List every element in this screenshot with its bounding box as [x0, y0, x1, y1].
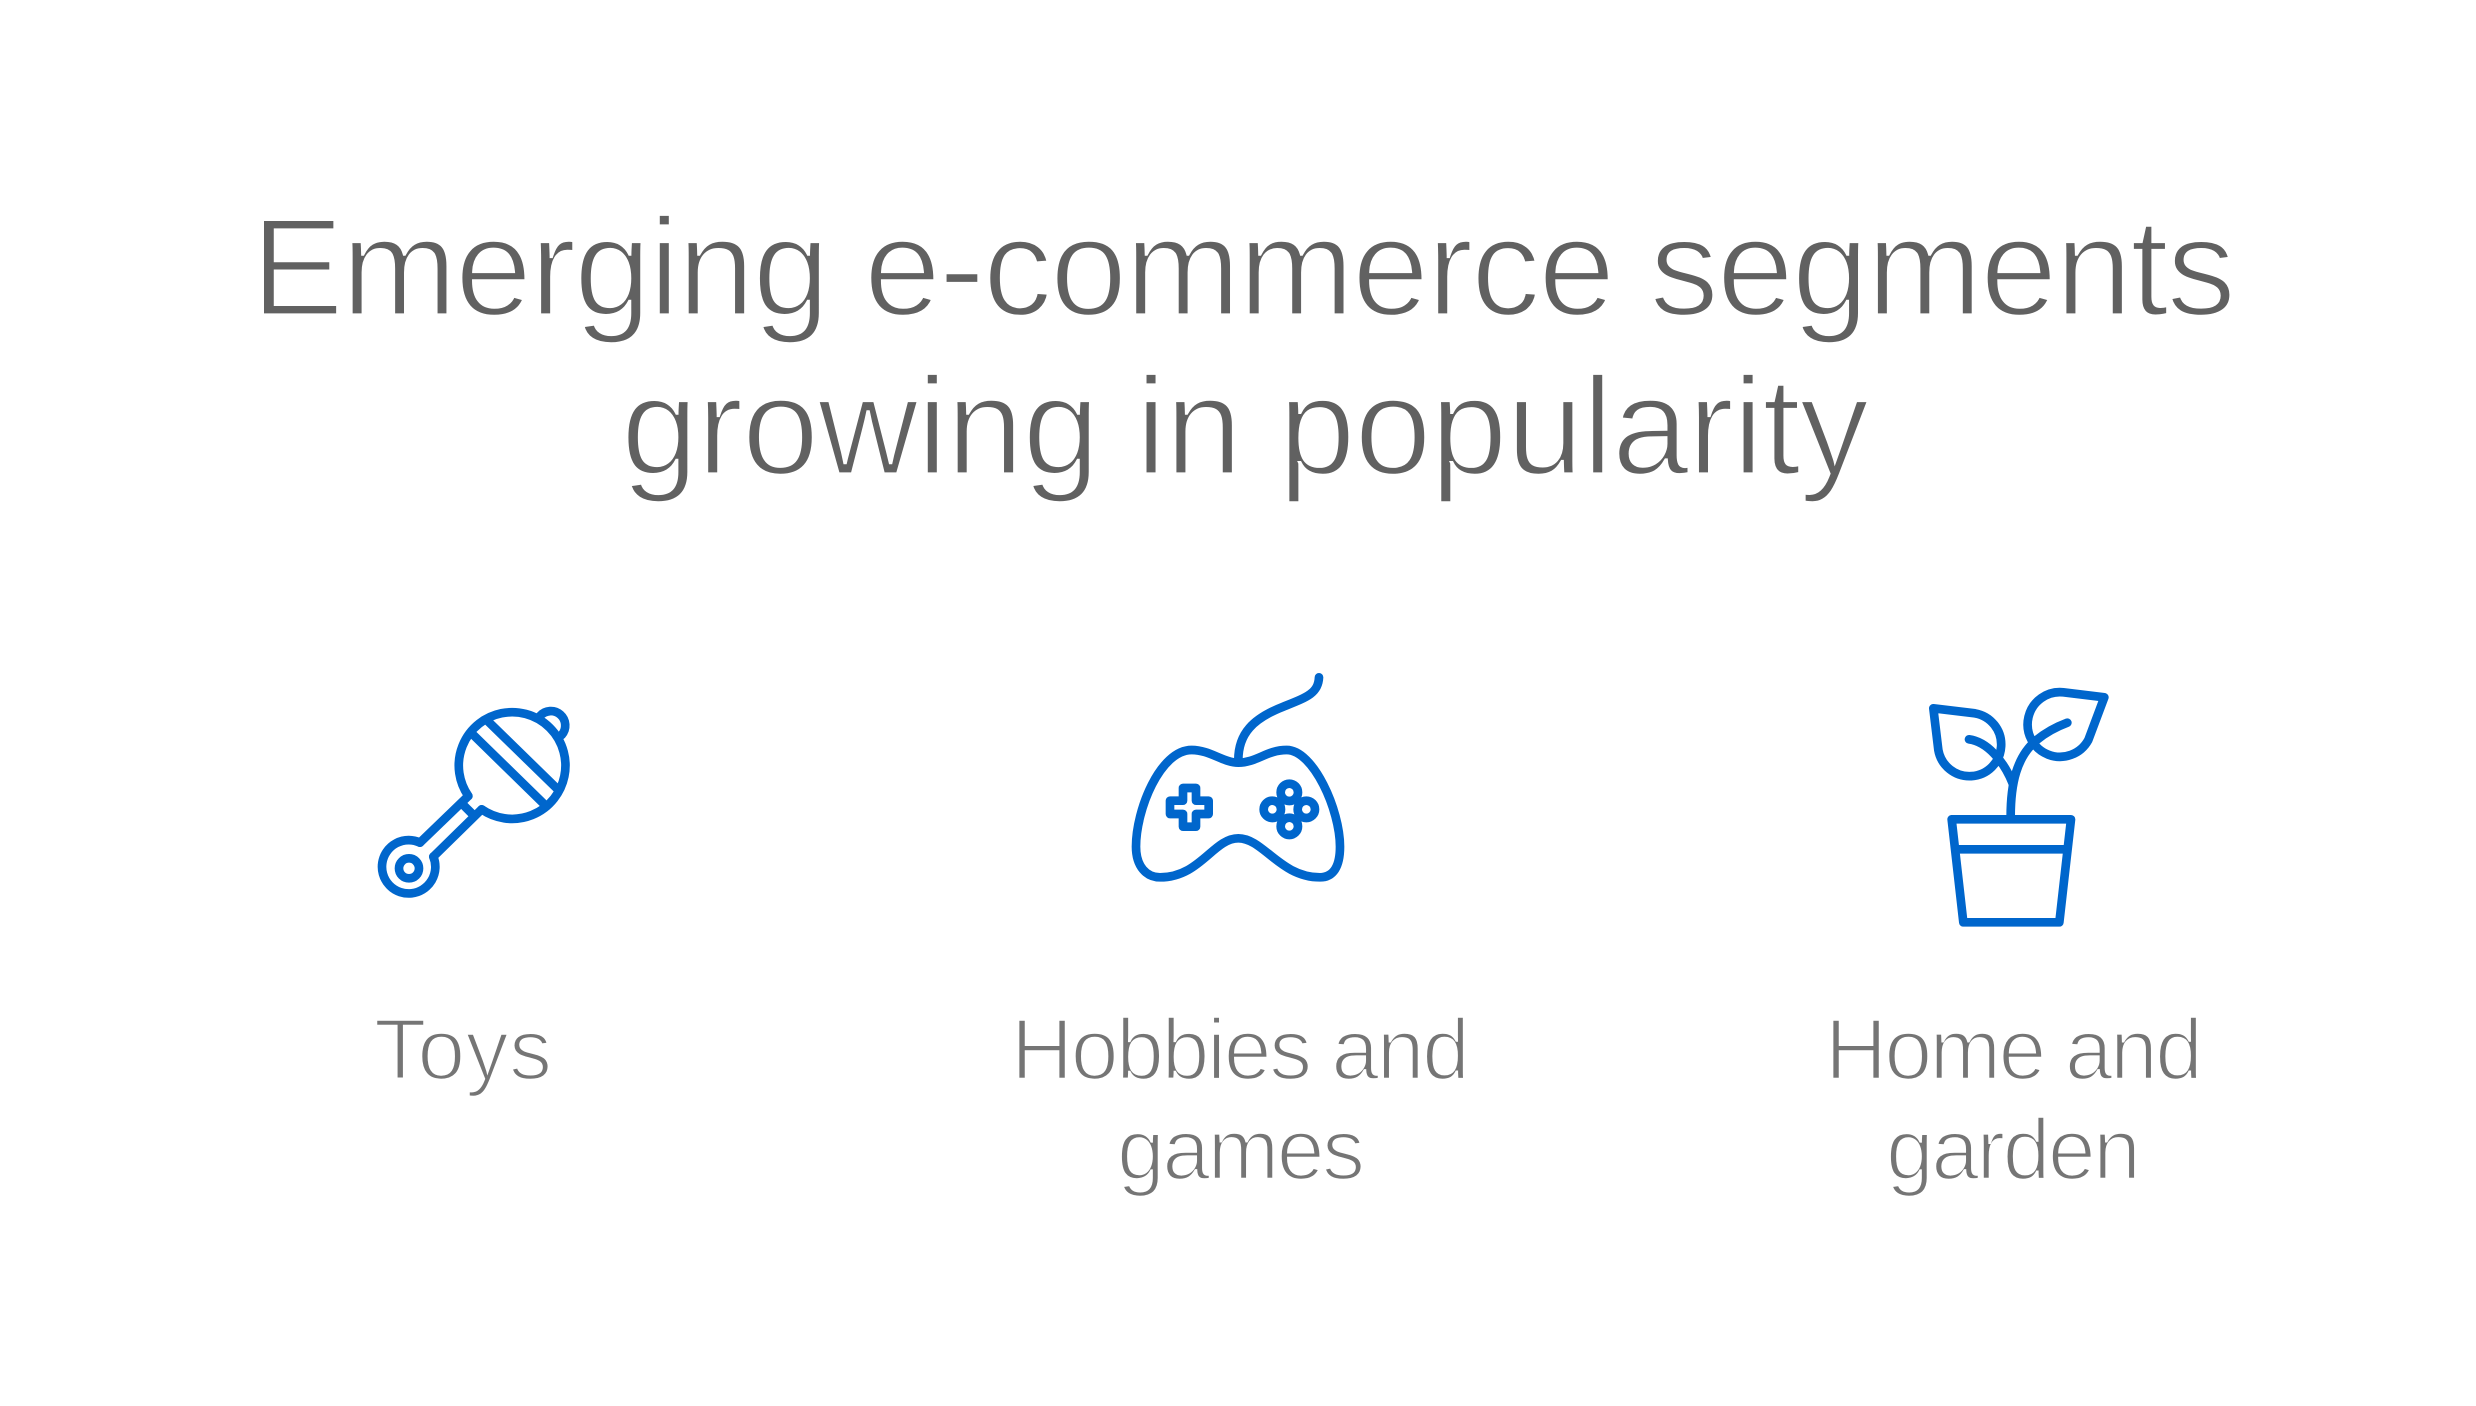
label: hobbies and games: Hobbies and [1011, 1002, 1470, 1098]
icon: game controller [1136, 677, 1340, 877]
title: growing in popularity [621, 349, 1870, 504]
label: home and garden [1825, 1002, 2203, 1198]
icon: baby rattle [382, 711, 565, 893]
title: Emerging e-commerce segments [251, 190, 2236, 345]
icon: potted plant [1933, 692, 2104, 922]
label: hobbies and games: games [1117, 1102, 1365, 1198]
label: toys: Toys [374, 1002, 552, 1098]
title [251, 190, 2236, 504]
label: home and garden: Home and [1825, 1002, 2203, 1098]
label: home and garden: garden [1886, 1102, 2141, 1198]
label: hobbies and games [1011, 1002, 1470, 1198]
